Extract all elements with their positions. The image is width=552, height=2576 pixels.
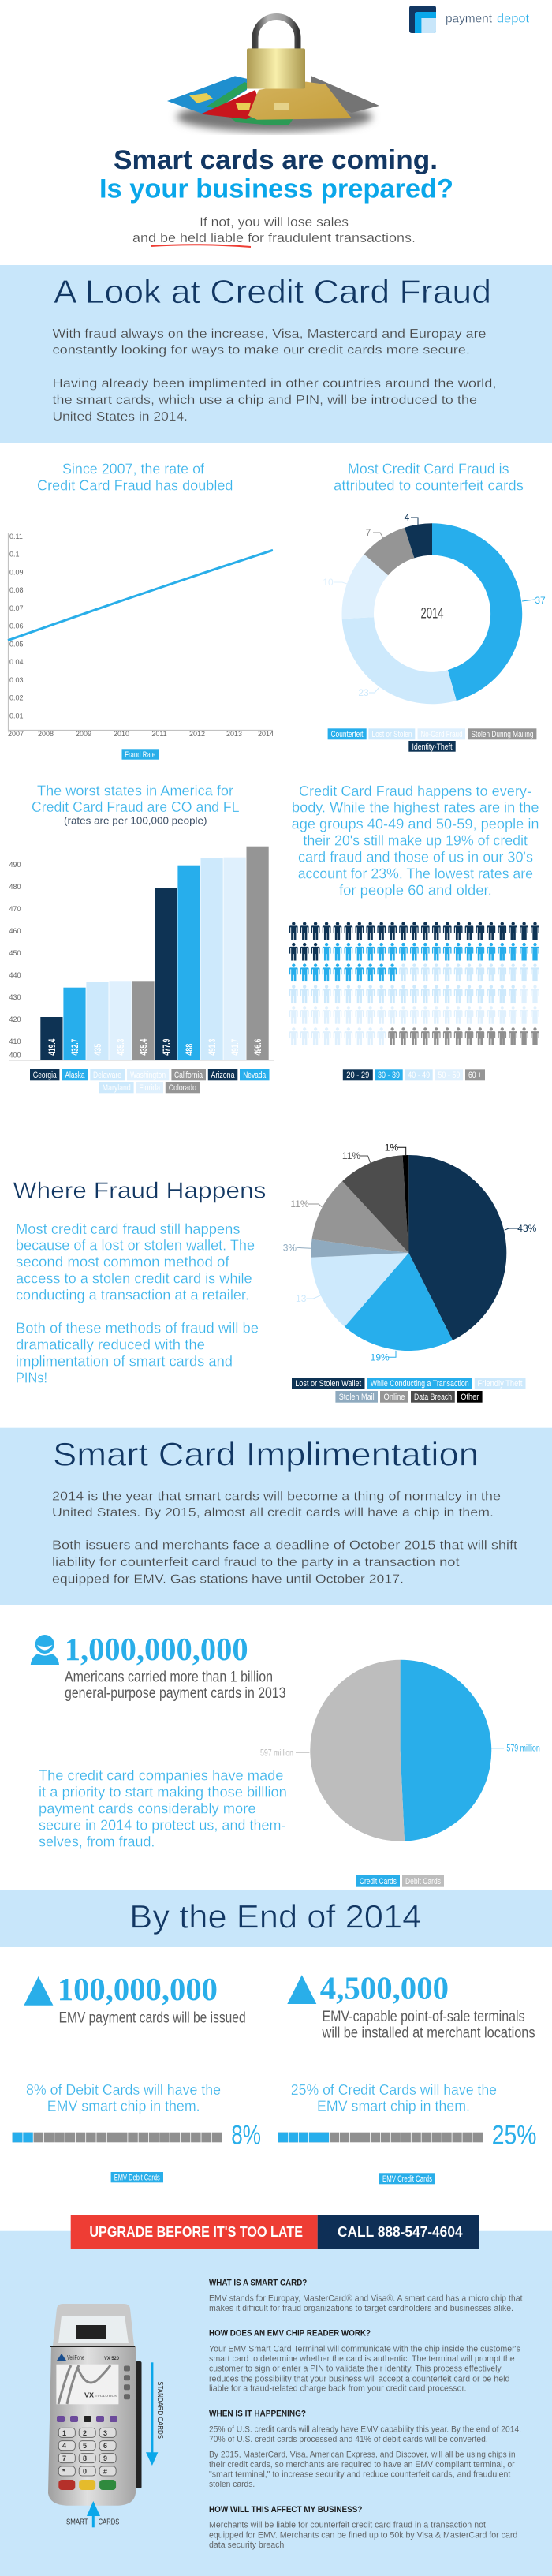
legend: 50 - 59 — [438, 1071, 460, 1080]
panel: worst states bar chart — [9, 783, 274, 1093]
text block: how does an emv chip reader work: Your EMV Smart Card Terminal will communicate with the chip inside the customer's — [209, 2344, 520, 2354]
paragraph: for people 60 and older. — [339, 882, 492, 898]
title: Smart cards are coming. — [114, 145, 438, 175]
y axis labels: 0.01 — [9, 712, 24, 720]
panel: one billion cards — [31, 1631, 540, 1887]
y axis labels: 490 — [9, 861, 21, 869]
legend: Credit Cards — [360, 1877, 397, 1886]
panel: EMV terminals stat — [287, 1970, 535, 2041]
percent: 25% — [492, 2120, 536, 2150]
big number: 4,500,000 — [320, 1970, 449, 2006]
text block: how does an emv chip reader work: HOW DOES AN EMV CHIP READER WORK? — [209, 2329, 371, 2339]
keypad — [58, 2428, 116, 2476]
paragraph: card fraud and those of us in our 30's — [298, 850, 533, 866]
illustration: card terminal — [48, 2304, 142, 2506]
panel: by the end of 2014 band — [0, 1890, 552, 1947]
text block: how will this affect my business: data security breach — [209, 2540, 284, 2550]
subtitle: and be held liable for fraudulent transactions. — [132, 230, 416, 245]
subtitle: If not, you will lose sales — [200, 215, 349, 230]
text block: when is it happening: 25% of U.S. credit cards will already have EMV capability this year. By the end of 2014, — [209, 2425, 521, 2434]
text: equipped for EMV. Gas stations have until October 2017. — [52, 1572, 404, 1586]
paragraph: dramatically reduced with the — [16, 1337, 205, 1352]
x axis labels: 2010 — [114, 730, 129, 738]
heading: Since 2007, the rate of — [62, 462, 205, 477]
heading: 25% of Credit Cards will have the — [291, 2082, 497, 2098]
panel: credit cards progress — [278, 2082, 536, 2184]
big number: 1,000,000,000 — [65, 1631, 248, 1667]
heading: Credit Card Fraud has doubled — [37, 478, 233, 494]
legend: EMV Debit Cards — [114, 2173, 160, 2182]
legend: Nevada — [243, 1071, 267, 1080]
screen: EVOLUTION — [95, 2394, 117, 2398]
key digits: 4 — [62, 2442, 66, 2450]
stat caption: Americans carried more than 1 billion — [65, 1669, 273, 1686]
text block: how does an emv chip reader work — [209, 2329, 520, 2394]
paragraph: because of a lost or stolen wallet. The — [16, 1237, 255, 1253]
text block: how does an emv chip reader work: liable for a fraud-related charge back from your credit card processor. — [209, 2384, 467, 2394]
y axis labels: 0.09 — [9, 568, 24, 576]
side buttons — [124, 2365, 130, 2399]
heading — [32, 783, 240, 815]
caption — [322, 2009, 535, 2041]
subtitle — [132, 215, 416, 247]
legend: Washington — [130, 1071, 166, 1080]
legend: Delaware — [93, 1071, 121, 1080]
heading — [334, 462, 524, 494]
text block: how will this affect my business: HOW WILL THIS AFFECT MY BUSINESS? — [209, 2505, 363, 2514]
y axis labels: 0.11 — [9, 533, 23, 540]
panel: call to action — [71, 2215, 479, 2249]
bar value labels: 419.4 — [47, 1038, 58, 1056]
arrow: smart cards: CARDS — [99, 2518, 120, 2527]
bar value labels: 435.4 — [138, 1038, 149, 1056]
panel: call to action: UPGRADE BEFORE IT'S TOO LATE — [89, 2224, 303, 2240]
heading: The worst states in America for — [37, 783, 233, 798]
key digits: 1 — [62, 2429, 66, 2437]
caption: EMV payment cards will be issued — [59, 2010, 246, 2026]
donut labels — [323, 512, 546, 698]
legend: No-Card Fraud — [421, 730, 462, 739]
legend — [111, 2172, 163, 2182]
paragraph: it a priority to start making those billlion — [39, 1784, 287, 1800]
panel: bottom faq band — [0, 2231, 552, 2576]
y axis labels — [9, 861, 21, 1060]
paragraph: selves, from fraud. — [39, 1834, 155, 1850]
y axis labels: 400 — [9, 1052, 21, 1060]
intro text: Having already been implimented in other countries around the world, — [52, 377, 497, 391]
bar value labels: 435.3 — [115, 1038, 126, 1056]
legend: EMV Credit Cards — [382, 2174, 432, 2184]
heading: Credit Card Fraud are CO and FL — [32, 799, 240, 815]
pie labels: 19% — [371, 1352, 390, 1363]
stat caption — [65, 1669, 285, 1702]
icon: person — [31, 1635, 59, 1665]
paragraph: second most common method of — [16, 1254, 230, 1270]
text block: when is it happening: 70% of U.S. credit cards processed and 41% of debit cards will be converted. — [209, 2435, 488, 2444]
legend: Lost or Stolen — [372, 730, 412, 739]
key digits — [62, 2429, 107, 2476]
legend: Identity-Theft — [412, 742, 453, 752]
y axis labels — [9, 533, 24, 720]
paragraph: Credit Card Fraud happens to every- — [299, 783, 531, 799]
donut labels: 10 — [323, 577, 334, 588]
pie labels: 11% — [290, 1198, 309, 1209]
verifone logo: VeriFone — [67, 2354, 84, 2361]
y axis labels: 460 — [9, 927, 21, 935]
progress bar — [13, 2132, 222, 2143]
legend: Arizona — [211, 1071, 235, 1080]
key digits: * — [62, 2468, 65, 2476]
x axis labels — [8, 730, 274, 738]
pie chart — [311, 1155, 506, 1351]
intro text: the smart cards, which use a chip and PIN, will be introduced to the — [52, 394, 477, 407]
pie labels: 579 million — [506, 1743, 540, 1754]
paragraph: Most credit card fraud still happens — [16, 1221, 241, 1237]
legend: Maryland — [103, 1083, 131, 1093]
pie labels: 1% — [385, 1142, 398, 1153]
logo: payment depot: payment — [446, 13, 493, 26]
y axis labels: 0.04 — [9, 658, 24, 666]
text block: what is a smart card: makes it difficult for fraud organizations to target cardholders and businesses alike. — [209, 2304, 513, 2313]
legend: Data Breach — [414, 1393, 452, 1402]
y axis labels: 0.1 — [9, 551, 20, 559]
legend: Alaska — [65, 1071, 85, 1080]
pie labels — [283, 1142, 537, 1363]
text block: what is a smart card — [209, 2279, 522, 2313]
bar value labels: 477.9 — [161, 1038, 172, 1056]
panel: EMV payment cards stat — [24, 1971, 246, 2026]
paragraph — [292, 783, 539, 898]
legend — [121, 749, 159, 760]
text block: what is a smart card: EMV stands for Europay, MasterCard® and Visa®. A smart card has a micro chip that — [209, 2294, 522, 2303]
paragraph: PINs! — [16, 1370, 47, 1386]
text block: how does an emv chip reader work: reduces the possibility that your business will accept a counterfeit card or be held — [209, 2374, 509, 2383]
legend — [356, 1875, 444, 1887]
y axis labels: 0.02 — [9, 694, 24, 702]
legend — [292, 1378, 525, 1403]
paragraph: age groups 40-49 and 50-59, people in — [292, 817, 539, 832]
panel: call to action: CALL 888-547-4604 — [338, 2224, 463, 2240]
text block: how will this affect my business: equipped for EMV. Merchants can be fined up to 50k by Visa & MasterCard for card — [209, 2530, 517, 2540]
text: 2014 is the year that smart cards will become a thing of normalcy in the — [52, 1490, 501, 1503]
icon: up triangle — [287, 1975, 316, 2004]
y axis labels: 0.03 — [9, 676, 24, 684]
arrow: smart cards: SMART — [66, 2518, 88, 2527]
text block: what is a smart card: WHAT IS A SMART CARD? — [209, 2279, 308, 2288]
arrow: standard cards: STANDARD CARDS — [155, 2381, 164, 2439]
heading: Smart Card Implimentation — [53, 1436, 479, 1473]
line: fraud rate — [8, 550, 273, 641]
logo: payment depot: depot — [497, 13, 530, 26]
verifone logo: VX 520 — [104, 2357, 120, 2361]
legend: Friendly Theft — [478, 1379, 522, 1389]
function buttons — [57, 2416, 117, 2422]
heading: By the End of 2014 — [129, 1897, 421, 1935]
heading: EMV smart chip in them. — [317, 2098, 470, 2114]
x axis labels: 2012 — [189, 730, 205, 738]
donut labels: 7 — [366, 527, 371, 538]
heading — [37, 462, 233, 494]
legend — [343, 1069, 485, 1080]
key digits: 0 — [83, 2468, 87, 2476]
donut: 2014 — [421, 606, 444, 622]
text block: how does an emv chip reader work: customer to sign or enter a PIN to validate their identity. This process effectively — [209, 2365, 502, 2374]
paragraph: access to a stolen credit card is while — [16, 1271, 252, 1287]
legend: Lost or Stolen Wallet — [295, 1379, 361, 1389]
legend: Other — [461, 1393, 479, 1402]
heading: A Look at Credit Card Fraud — [54, 273, 491, 310]
y axis labels: 430 — [9, 993, 21, 1001]
intro text — [52, 327, 497, 424]
paragraph: payment cards considerably more — [39, 1800, 256, 1816]
x axis labels: 2014 — [258, 730, 274, 738]
panel: where fraud happens — [13, 1142, 537, 1403]
legend: Debit Cards — [405, 1877, 441, 1886]
legend: Online — [383, 1393, 405, 1402]
paragraph: conducting a transaction at a retailer. — [16, 1288, 249, 1303]
y axis labels: 480 — [9, 883, 21, 891]
heading: Most Credit Card Fraud is — [348, 462, 509, 477]
key digits: # — [103, 2468, 107, 2476]
bar value labels: 491.3 — [207, 1038, 218, 1056]
key digits: 8 — [83, 2454, 87, 2462]
donut labels: 4 — [405, 512, 410, 523]
big number: 100,000,000 — [58, 1971, 218, 2007]
key digits: 3 — [103, 2429, 107, 2437]
percent: 8% — [231, 2120, 261, 2150]
bar value labels: 491.7 — [229, 1038, 241, 1056]
legend: Florida — [139, 1083, 161, 1093]
logo: payment depot — [409, 6, 530, 33]
key digits: 9 — [103, 2454, 107, 2462]
key digits: 5 — [83, 2442, 87, 2450]
panel: debit cards progress — [13, 2082, 261, 2182]
text block: when is it happening: WHEN IS IT HAPPENING? — [209, 2410, 306, 2419]
heading: 8% of Debit Cards will have the — [26, 2082, 221, 2098]
y axis labels: 0.08 — [9, 586, 24, 594]
pie labels: 13 — [296, 1293, 307, 1304]
paragraph: their 20's still make up 19% of credit — [303, 833, 528, 849]
pictogram: people — [289, 922, 539, 1045]
panel: a look at credit card fraud — [0, 265, 552, 443]
heading: attributed to counterfeit cards — [334, 478, 524, 494]
bar value labels: 435 — [92, 1043, 103, 1056]
heading: Where Fraud Happens — [13, 1179, 266, 1204]
text: liability for counterfeit card fraud to the party in a transaction not — [52, 1556, 460, 1569]
paragraph: implimentation of smart cards and — [16, 1354, 233, 1370]
x axis labels: 2011 — [151, 730, 167, 738]
pie labels: 11% — [342, 1150, 360, 1161]
pie labels: 597 million — [260, 1747, 293, 1758]
heading — [291, 2082, 497, 2114]
donut labels: 23 — [358, 687, 369, 698]
panel: line chart fraud rate — [8, 462, 274, 760]
panel: header — [99, 6, 530, 247]
legend: 30 - 39 — [378, 1071, 400, 1080]
legend: Stolen During Mailing — [472, 730, 533, 739]
icon: padlock over credit cards — [167, 17, 379, 132]
verifone logo — [57, 2354, 120, 2361]
paragraph: The credit card companies have made — [39, 1768, 283, 1784]
x axis labels: 2007 — [8, 730, 24, 738]
screen: VX — [84, 2392, 95, 2398]
legend: 20 - 29 — [346, 1071, 369, 1080]
text: Both issuers and merchants face a deadline of October 2015 that will shift — [52, 1539, 518, 1553]
key digits: 7 — [62, 2454, 66, 2462]
y axis labels: 0.07 — [9, 604, 24, 612]
progress bar — [278, 2132, 483, 2143]
intro text: United States in 2014. — [52, 410, 188, 424]
donut labels: 37 — [535, 595, 546, 606]
note: (rates are per 100,000 people) — [64, 814, 207, 826]
title: Is your business prepared? — [99, 174, 453, 204]
intro text: constantly looking for ways to make our credit cards more secure. — [52, 344, 470, 357]
y axis labels: 470 — [9, 905, 21, 913]
paragraph: account for 23%. The lowest rates are — [298, 866, 533, 882]
text block: when is it happening: "smart terminal," to increase security and reduce counterfeit cards, and fraudulent — [209, 2469, 510, 2479]
legend: 40 - 49 — [408, 1071, 430, 1080]
legend — [379, 2173, 435, 2184]
action keys — [58, 2480, 116, 2490]
title — [99, 145, 453, 204]
text block: how will this affect my business — [209, 2505, 517, 2550]
paragraph: body. While the highest rates are in the — [292, 799, 539, 815]
legend — [30, 1069, 270, 1093]
legend — [328, 728, 536, 752]
text: United States. By 2015, almost all credit cards will have a chip in them. — [52, 1506, 494, 1520]
pie labels — [260, 1743, 540, 1758]
legend: Stolen Mail — [339, 1393, 375, 1402]
paragraph: secure in 2014 to protect us, and them- — [39, 1818, 285, 1834]
text block: when is it happening: their credit cards, so merchants are required to have an EMV compliant terminal, or — [209, 2460, 515, 2469]
intro text: With fraud always on the increase, Visa, Mastercard and Europay are — [52, 327, 487, 341]
text block: how does an emv chip reader work: smart card to determine whether the card is authentic. The terminal will prompt the — [209, 2354, 515, 2364]
stat caption: general-purpose payment cards in 2013 — [65, 1685, 285, 1702]
text block: when is it happening — [209, 2410, 521, 2489]
bar value labels: 496.6 — [252, 1038, 263, 1056]
legend: While Conducting a Transaction — [371, 1379, 469, 1389]
bar value labels — [47, 1038, 263, 1056]
donut — [342, 523, 522, 704]
x axis labels: 2008 — [38, 730, 54, 738]
paragraph — [16, 1221, 259, 1386]
key digits: 6 — [103, 2442, 107, 2450]
legend: California — [174, 1071, 203, 1080]
y axis labels: 420 — [9, 1015, 21, 1023]
bar value labels: 488 — [184, 1043, 195, 1056]
y axis labels: 0.05 — [9, 641, 24, 649]
pie labels: 3% — [283, 1242, 297, 1253]
legend: 60 + — [468, 1071, 482, 1080]
heading: EMV smart chip in them. — [47, 2098, 200, 2114]
y axis labels: 410 — [9, 1038, 21, 1045]
paragraph: Both of these methods of fraud will be — [16, 1320, 259, 1336]
paragraph — [39, 1768, 287, 1850]
text block: how will this affect my business: Merchants will be liable for counterfeit credit card fraud in a transaction not — [209, 2521, 486, 2530]
screen — [56, 2365, 118, 2404]
text block: when is it happening: By 2015, MasterCard, Visa, American Express, and Discover, will all be using chips in — [209, 2450, 516, 2459]
pie labels: 43% — [517, 1223, 537, 1234]
key digits: 2 — [83, 2429, 87, 2437]
panel: smart card implimentation — [0, 1428, 552, 1605]
heading — [26, 2082, 221, 2114]
x axis labels: 2013 — [226, 730, 242, 738]
y axis labels: 450 — [9, 949, 21, 957]
y axis labels: 0.06 — [9, 622, 24, 630]
legend: Colorado — [169, 1083, 196, 1093]
legend: Georgia — [33, 1071, 57, 1080]
legend: Counterfeit — [331, 730, 363, 739]
bars — [9, 847, 274, 1060]
legend: Fraud Rate — [125, 750, 155, 760]
icon: up triangle — [24, 1976, 53, 2006]
pie chart — [310, 1660, 491, 1841]
text block: when is it happening: stolen cards. — [209, 2480, 255, 2489]
panel: age groups pictogram — [289, 783, 539, 1080]
panel: donut chart counterfeit — [323, 462, 546, 752]
y axis labels: 440 — [9, 971, 21, 979]
arrow: standard cards — [146, 2362, 164, 2466]
x axis labels: 2009 — [76, 730, 91, 738]
text — [52, 1490, 518, 1586]
bar value labels: 432.7 — [69, 1038, 80, 1056]
arrow: smart cards — [66, 2501, 120, 2527]
